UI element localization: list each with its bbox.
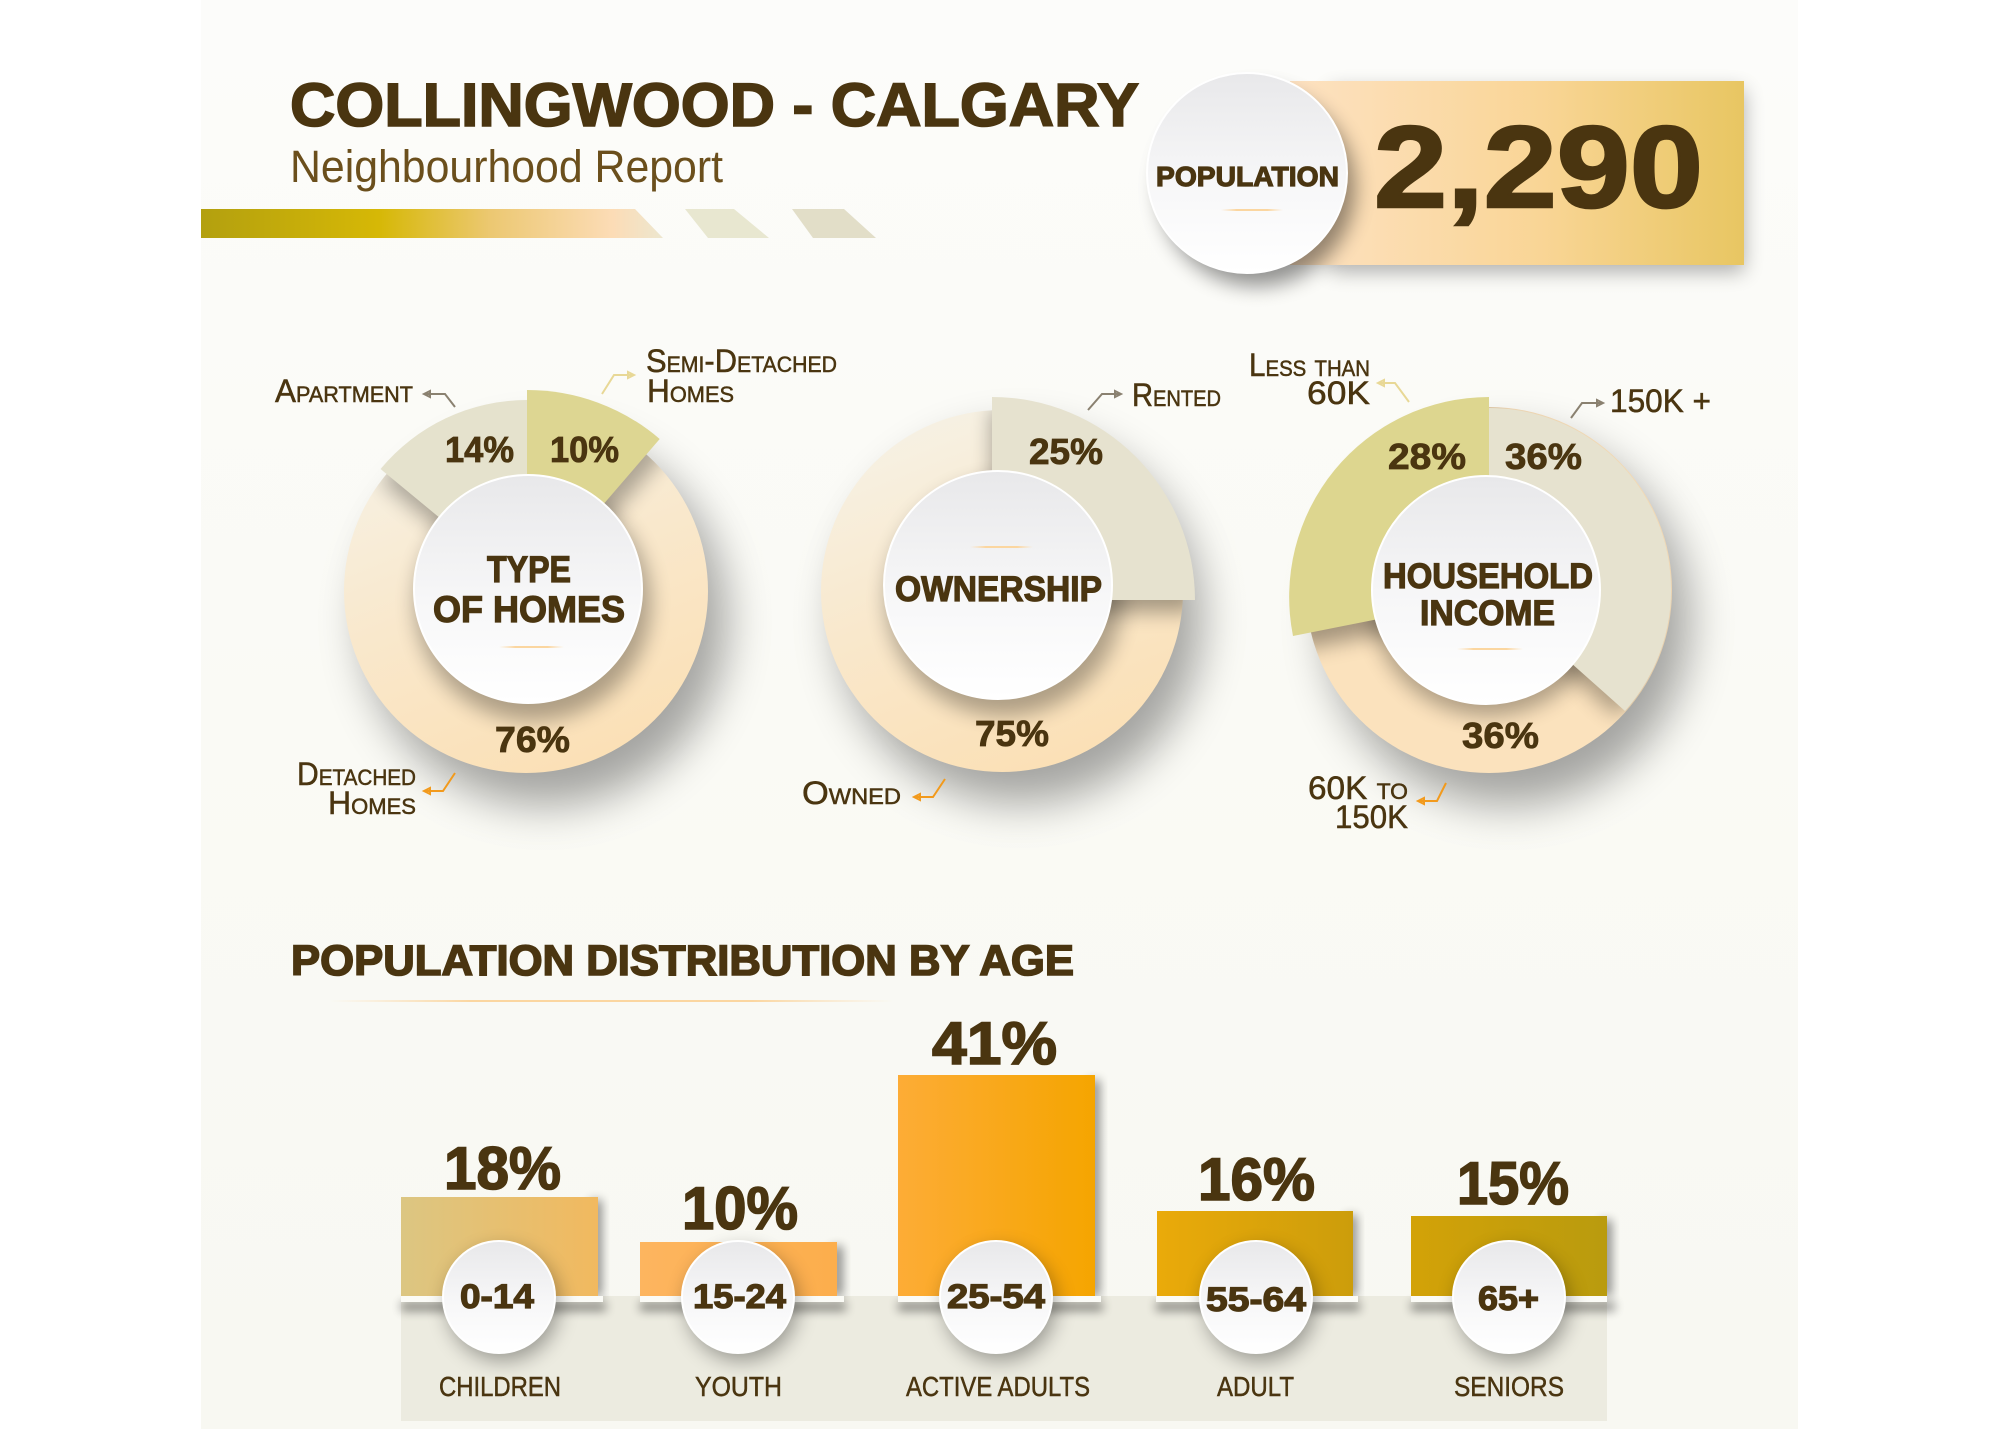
label: detached homes: Homes	[328, 785, 416, 821]
label: detached homes	[297, 756, 416, 821]
bar: children	[401, 1197, 598, 1296]
age ranges: 65+	[1478, 1280, 1539, 1318]
label: less than 60K: Less than	[1249, 347, 1370, 383]
arrow: semi-detached	[602, 372, 634, 394]
value: 36% upper: 36%	[1505, 436, 1582, 477]
slice: semi-detached	[527, 390, 660, 593]
bar: adult	[1157, 1211, 1353, 1296]
label: semi-detached homes: Semi-Detached	[646, 343, 837, 379]
population label: POPULATION	[1156, 161, 1339, 192]
bar percentages: 41%	[932, 1010, 1057, 1077]
arrow: 60K to 150K	[1418, 783, 1446, 804]
slice: 150K plus	[1489, 408, 1671, 711]
value: 25%: 25%	[1029, 431, 1103, 472]
center label	[1383, 557, 1593, 633]
arrow: apartment	[424, 391, 455, 407]
bar: seniors	[1411, 1216, 1607, 1296]
age group names: SENIORS	[1454, 1371, 1564, 1402]
infographic canvas	[201, 72, 1798, 1429]
arrow: 150K plus	[1571, 400, 1603, 418]
value: 10%: 10%	[550, 429, 619, 470]
slice: rented	[992, 397, 1195, 600]
bar percentages: 18%	[444, 1135, 561, 1202]
panel: population total	[1147, 73, 1744, 286]
label: less than 60K: 60K	[1307, 375, 1370, 411]
arrow: rented	[1088, 391, 1121, 410]
bar percentages: 16%	[1198, 1146, 1315, 1213]
age group names: ADULT	[1217, 1371, 1294, 1402]
panel: page background	[201, 0, 1798, 1429]
label: 60K to 150K	[1308, 770, 1408, 835]
bar: active adults	[898, 1075, 1095, 1296]
label: owned: Owned	[802, 775, 901, 811]
value: 14%: 14%	[445, 429, 514, 470]
label: 150K plus: 150K +	[1610, 383, 1711, 419]
age ranges: 55-64	[1206, 1281, 1306, 1319]
center label: INCOME	[1420, 594, 1555, 633]
base band	[401, 1296, 1607, 1421]
population number: 2,290	[1374, 102, 1703, 232]
value: 28%: 28%	[1388, 436, 1466, 477]
chart: household income donut	[1249, 347, 1711, 835]
value: 76%: 76%	[495, 719, 570, 760]
arrow: detached	[424, 773, 455, 794]
value: 75%: 75%	[975, 713, 1049, 754]
arrow: owned	[914, 779, 945, 800]
bar: youth	[640, 1242, 837, 1296]
center circle	[414, 475, 642, 703]
center label: OF HOMES	[433, 589, 625, 630]
population circle	[1147, 73, 1347, 273]
center label: OWNERSHIP	[895, 570, 1102, 609]
label: semi-detached homes: Homes	[647, 373, 734, 409]
value: 36% lower: 36%	[1462, 715, 1539, 756]
title: COLLINGWOOD - CALGARY	[290, 71, 1139, 139]
age circles	[443, 1241, 1565, 1353]
age ranges: 0-14	[460, 1278, 534, 1316]
chart: type of homes donut	[275, 343, 837, 821]
age ranges	[460, 1278, 1539, 1319]
chart: age distribution bars	[401, 1010, 1615, 1421]
age ranges: 15-24	[693, 1278, 786, 1316]
label: 60K to 150K: 60K to	[1308, 770, 1408, 806]
heading: population distribution by age: POPULATION DISTRIBUTION BY AGE	[291, 937, 1074, 985]
slice: apartment	[381, 400, 527, 590]
label: 60K to 150K: 150K	[1335, 799, 1408, 835]
age group names	[439, 1371, 1564, 1402]
center label: HOUSEHOLD	[1383, 557, 1593, 596]
label: rented: Rented	[1132, 377, 1221, 413]
age group names: ACTIVE ADULTS	[906, 1371, 1090, 1402]
subtitle: Neighbourhood Report	[290, 141, 723, 192]
center circle	[884, 471, 1112, 699]
center label: TYPE	[487, 549, 571, 590]
circle shadows	[447, 1249, 1569, 1361]
bar percentages: 15%	[1457, 1150, 1569, 1217]
label: apartment: Apartment	[275, 373, 413, 409]
label: less than 60K	[1249, 347, 1370, 411]
chart: ownership donut	[802, 377, 1221, 811]
bar percentages: 10%	[682, 1175, 798, 1242]
center label	[433, 549, 625, 630]
bar percentages	[444, 1010, 1569, 1242]
age group names: YOUTH	[695, 1371, 782, 1402]
label: detached homes: Detached	[297, 756, 416, 792]
slice: less than 60K	[1289, 397, 1489, 636]
decorative gradient ribbon	[201, 209, 876, 238]
age ranges: 25-54	[947, 1278, 1045, 1316]
title block	[201, 71, 1139, 238]
label: semi-detached homes	[646, 343, 837, 409]
arrow: less than 60K	[1378, 380, 1409, 402]
age group names: CHILDREN	[439, 1371, 561, 1402]
center circle	[1372, 476, 1600, 704]
